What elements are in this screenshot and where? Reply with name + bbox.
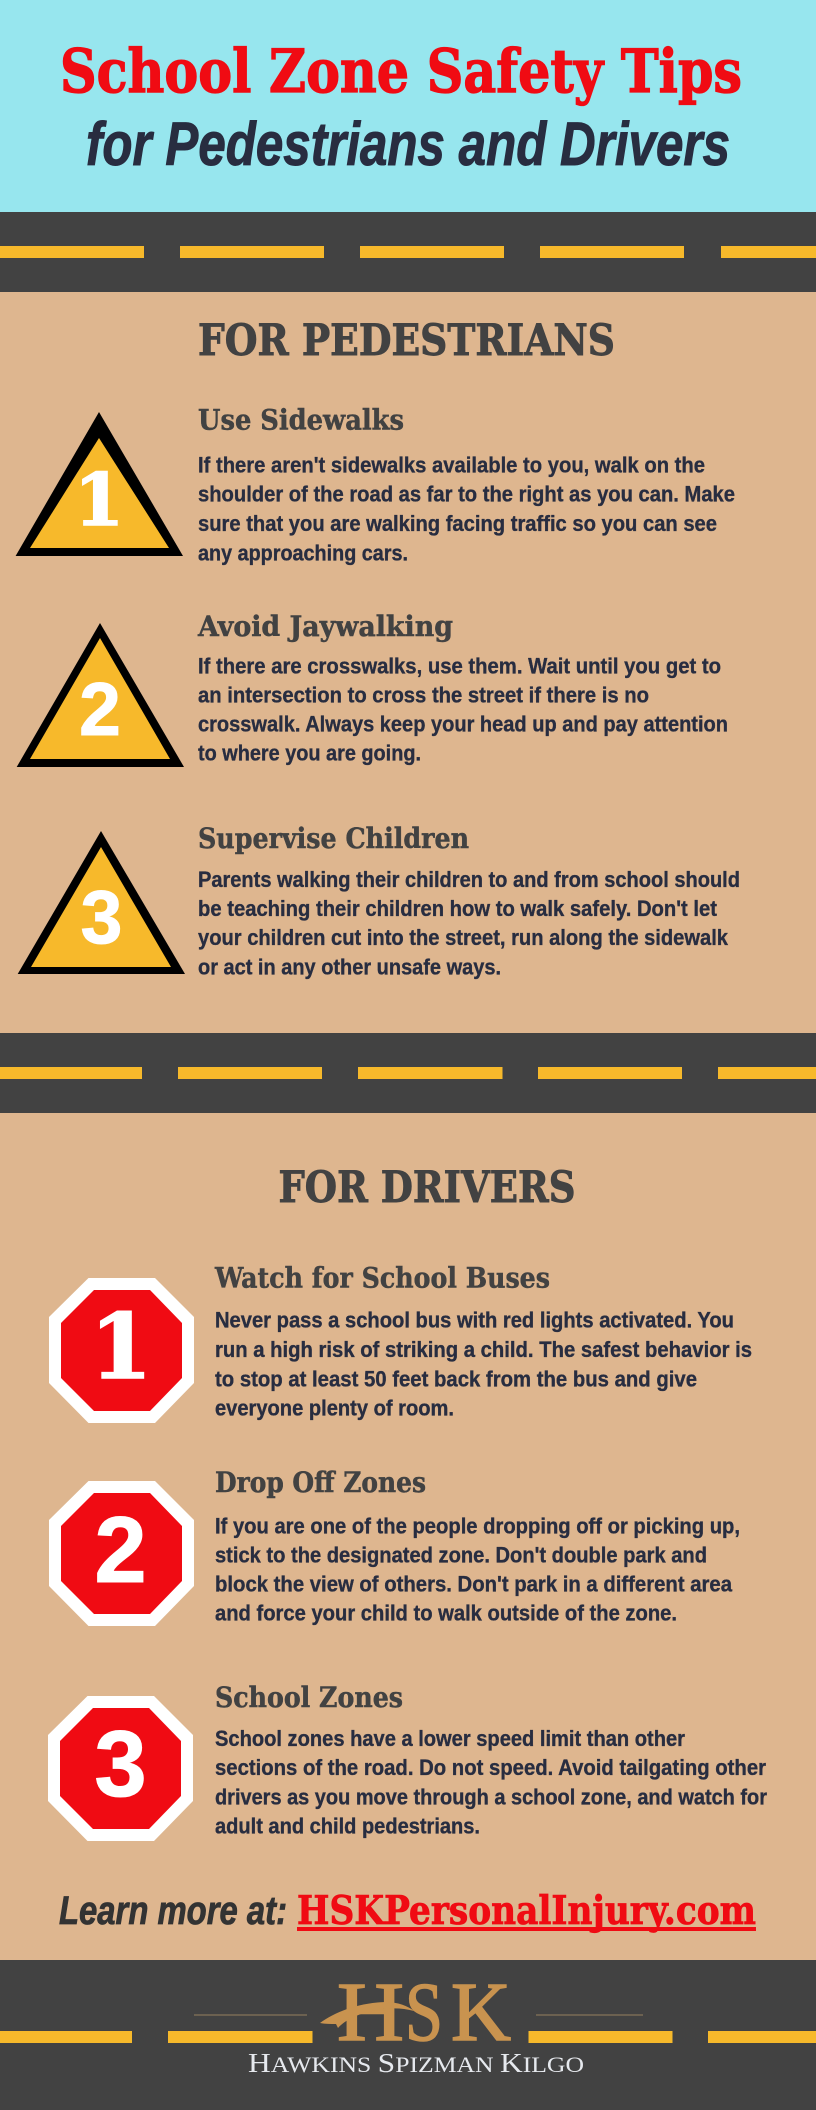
logo swoosh bbox=[320, 2002, 414, 2028]
icon: stop sign 3 bbox=[48, 1696, 193, 1841]
subheading: school zones: School Zones bbox=[215, 1681, 403, 1714]
tip: supervise children bbox=[18, 822, 740, 980]
icon: warning triangle 3: 3 bbox=[81, 875, 122, 959]
tip: watch for school buses bbox=[49, 1262, 752, 1423]
subheading: supervise children: Supervise Children bbox=[198, 822, 469, 855]
subheading: use sidewalks: Use Sidewalks bbox=[198, 404, 404, 436]
icon: stop sign 1: 1 bbox=[90, 1294, 152, 1400]
logo wordmark: HAWKINS SPIZMAN KILGO bbox=[248, 2048, 584, 2078]
text block: drop off zones bbox=[215, 1514, 740, 1626]
icon: warning triangle 2: 2 bbox=[79, 667, 121, 751]
road divider: top bbox=[0, 212, 816, 292]
text block: use sidewalks: If there aren't sidewalks available to you, walk on the bbox=[198, 452, 705, 478]
logo: Hawkins Spizman Kilgo bbox=[194, 1966, 643, 2078]
text block: supervise children: your children cut into the street, run along the sidewalk bbox=[198, 925, 728, 950]
text block: use sidewalks: any approaching cars. bbox=[198, 540, 408, 566]
logo letters: K bbox=[451, 1966, 511, 2059]
icon: stop sign 3: 3 bbox=[94, 1711, 147, 1816]
subheading: watch for school buses: Watch for School Buses bbox=[214, 1262, 550, 1294]
call to action bbox=[59, 1888, 756, 1934]
text block: avoid jaywalking: If there are crosswalks, use them. Wait until you get to bbox=[198, 654, 721, 678]
subheading: drop off zones: Drop Off Zones bbox=[215, 1466, 426, 1499]
text block: use sidewalks: sure that you are walking facing traffic so you can see bbox=[198, 511, 717, 536]
tip: drop off zones bbox=[49, 1466, 740, 1626]
text block: supervise children: be teaching their children how to walk safely. Don't let bbox=[198, 896, 717, 921]
icon: stop sign 1 bbox=[49, 1278, 194, 1423]
tip: use sidewalks bbox=[16, 404, 735, 566]
panel: for drivers bbox=[48, 1163, 767, 1841]
logo letters: H bbox=[337, 1966, 404, 2059]
icon: warning triangle 1: 1 bbox=[74, 457, 124, 542]
text block: watch for school buses: everyone plenty of room. bbox=[215, 1396, 454, 1420]
text block: use sidewalks: shoulder of the road as far to the right as you can. Make bbox=[198, 482, 735, 506]
text block: avoid jaywalking: crosswalk. Always keep your head up and pay attention bbox=[198, 712, 728, 736]
icon: stop sign 2: 2 bbox=[94, 1497, 147, 1602]
subheading: avoid jaywalking: Avoid Jaywalking bbox=[197, 610, 453, 643]
text block: avoid jaywalking: an intersection to cross the street if there is no bbox=[198, 682, 649, 708]
text block: school zones bbox=[215, 1726, 767, 1838]
text block: school zones: sections of the road. Do not speed. Avoid tailgating other bbox=[215, 1755, 766, 1780]
logo letters bbox=[337, 1966, 511, 2059]
text block: drop off zones: and force your child to walk outside of the zone. bbox=[215, 1600, 677, 1626]
tip: school zones bbox=[48, 1681, 767, 1841]
call to action: Learn more at: bbox=[59, 1889, 287, 1933]
icon: warning triangle 3 bbox=[18, 831, 185, 974]
footer road bbox=[0, 1960, 816, 2110]
panel: for pedestrians bbox=[16, 316, 740, 980]
text block: avoid jaywalking bbox=[198, 654, 728, 766]
logo letters: S bbox=[405, 1966, 443, 2059]
tip: avoid jaywalking bbox=[17, 610, 728, 767]
text block: avoid jaywalking: to where you are going. bbox=[198, 740, 421, 766]
heading: for pedestrians: FOR PEDESTRIANS bbox=[198, 316, 615, 366]
text block: supervise children bbox=[198, 867, 740, 980]
text block: watch for school buses: to stop at least 50 feet back from the bus and give bbox=[215, 1366, 697, 1392]
header panel bbox=[0, 0, 816, 212]
icon: warning triangle 1 bbox=[16, 412, 183, 556]
road divider: middle bbox=[0, 1033, 816, 1113]
text block: watch for school buses: Never pass a school bus with red lights activated. You bbox=[215, 1308, 734, 1332]
call to action: HSKPersonalInjury.com bbox=[297, 1888, 756, 1934]
text block: school zones: School zones have a lower speed limit than other bbox=[215, 1726, 685, 1751]
text block: drop off zones: block the view of others. Don't park in a different area bbox=[215, 1572, 732, 1596]
text block: use sidewalks bbox=[198, 452, 735, 566]
text block: drop off zones: stick to the designated zone. Don't double park and bbox=[215, 1542, 707, 1568]
icon: stop sign 2 bbox=[49, 1481, 194, 1626]
text block: watch for school buses: run a high risk of striking a child. The safest behavior is bbox=[215, 1337, 752, 1362]
text block: supervise children: Parents walking their children to and from school should bbox=[198, 867, 740, 892]
text block: supervise children: or act in any other unsafe ways. bbox=[198, 954, 501, 980]
text block: school zones: adult and child pedestrians. bbox=[215, 1814, 480, 1838]
text block: watch for school buses bbox=[215, 1308, 752, 1420]
heading: for drivers: FOR DRIVERS bbox=[278, 1163, 576, 1213]
text block: drop off zones: If you are one of the people dropping off or picking up, bbox=[215, 1514, 740, 1538]
icon: warning triangle 2 bbox=[17, 623, 184, 767]
